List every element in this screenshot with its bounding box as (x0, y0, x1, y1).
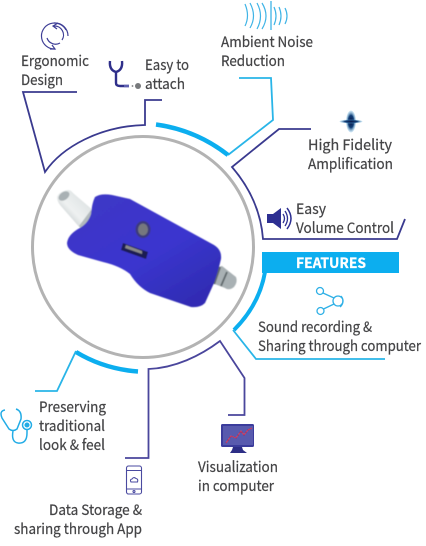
text: easy volume control: Easy (296, 198, 326, 219)
text: easy volume control: Volume Control (296, 217, 394, 238)
icon: speaker (267, 208, 291, 229)
text: sound recording (258, 316, 421, 356)
text: data storage (14, 499, 142, 539)
text: preserving traditional look and feel: look & feel (39, 434, 105, 455)
text: preserving traditional look and feel (39, 396, 106, 455)
connector: ergonomic and easy to attach (23, 92, 162, 172)
text: data storage: Data Storage & (49, 499, 142, 520)
icon: high fidelity waveform (340, 110, 362, 132)
features banner: FEATURES (296, 253, 366, 273)
text: ambient noise reduction: Reduction (221, 50, 285, 71)
text: high fidelity amplification (308, 134, 393, 174)
text: ambient noise reduction (221, 31, 313, 71)
icon: circular arrows (41, 23, 68, 49)
text: data storage: sharing through App (14, 518, 142, 539)
text: easy volume control (296, 198, 394, 238)
left connector (57, 189, 98, 230)
connector: sound recording (233, 272, 385, 359)
connector: preserving look (35, 351, 138, 391)
connector: data storage and visualization (125, 341, 244, 458)
text: ergonomic design: Design (21, 69, 63, 90)
icon: sound waves (245, 1, 287, 30)
icon: phone with cloud (126, 466, 142, 494)
text: high fidelity amplification: High Fidelity (308, 134, 392, 155)
icon: stethoscope cyan (1, 409, 32, 443)
text: preserving traditional look and feel: traditional (39, 415, 105, 436)
text: ergonomic design: Ergonomic (21, 50, 89, 71)
icon: monitor chart (221, 424, 254, 453)
text: easy to attach (145, 54, 189, 94)
device port (121, 243, 148, 259)
text: visualization in computer: Visualization (198, 456, 278, 477)
text: preserving traditional look and feel: Preserving (39, 396, 106, 417)
connector: ambient noise (156, 78, 273, 155)
text: ergonomic design (21, 50, 89, 90)
text: easy to attach: Easy to (145, 54, 189, 75)
text: easy to attach: attach (145, 73, 185, 94)
text: sound recording: Sound recording & (258, 316, 372, 337)
text: visualization in computer (198, 456, 278, 496)
connector: high fidelity and volume (232, 129, 405, 239)
device button (136, 221, 150, 238)
right connector (212, 266, 237, 289)
features banner (262, 252, 399, 273)
device body (67, 194, 221, 307)
icon: share nodes (316, 288, 343, 314)
icon: stethoscope dark (110, 61, 141, 89)
text: visualization in computer: in computer (198, 475, 274, 496)
central gray ring (32, 136, 254, 358)
device (57, 189, 237, 307)
text: ambient noise reduction: Ambient Noise (221, 31, 313, 52)
text: high fidelity amplification: Amplification (308, 153, 393, 174)
